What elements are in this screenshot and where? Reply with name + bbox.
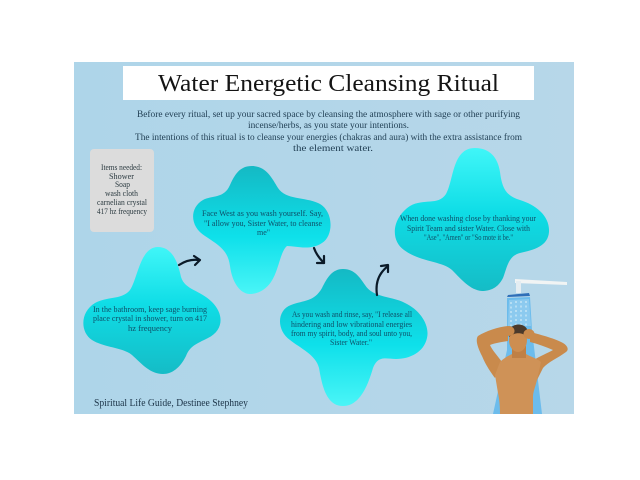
step 4 blob: Spirit Team and sister Water. Close with: [407, 224, 530, 233]
intro text: the element water.: [293, 143, 373, 153]
step 1 blob: hz frequency: [128, 324, 172, 333]
step 1 blob: place crystal in shower, turn on 417: [93, 314, 207, 323]
arrow: step 1 to step 2: [179, 256, 200, 265]
step 3 blob: hindering and low vibrational energies: [291, 320, 412, 329]
intro text: Before every ritual, set up your sacred space by cleansing the atmosphere with sage or other purifying: [137, 109, 521, 119]
step 3 blob: [280, 269, 428, 406]
panel: items needed: 417 hz frequency: [97, 207, 147, 216]
arrow: step 2 to step 3: [314, 248, 324, 263]
background panel: [74, 62, 574, 414]
intro text: incense/herbs, as you state your intentions.: [248, 120, 409, 130]
step 4 blob: "Ase", "Amen" or "So mote it be.": [424, 233, 513, 242]
illustration: man in shower: [477, 279, 568, 414]
title: Water Energetic Cleansing Ritual: [158, 70, 499, 97]
step 3 blob: Sister Water.": [330, 338, 372, 347]
arrow: step 3 to step 4: [376, 265, 388, 295]
step 1 blob: In the bathroom, keep sage burning: [93, 305, 207, 314]
panel: items needed: carnelian crystal: [97, 198, 148, 207]
intro text: The intentions of this ritual is to cleanse your energies (chakras and aura) with the extra assistance from: [135, 132, 522, 142]
step 1 blob: [83, 247, 221, 374]
step 4 blob: When done washing close by thanking your: [400, 214, 536, 223]
step 2 blob: Face West as you wash yourself. Say,: [202, 209, 323, 218]
intro text: [135, 109, 522, 153]
panel: items needed: [90, 149, 154, 232]
footer credit: Spiritual Life Guide, Destinee Stephney: [94, 398, 249, 409]
step 4 blob: [395, 148, 549, 291]
step 3 blob: As you wash and rinse, say, "I release all: [292, 310, 413, 319]
panel: items needed: Shower: [109, 172, 134, 181]
step 2 blob: me": [257, 228, 270, 237]
step 2 blob: "I allow you, Sister Water, to cleanse: [204, 219, 322, 228]
panel: items needed: Soap: [115, 180, 130, 189]
panel: items needed: Items needed:: [101, 163, 142, 172]
title: [123, 66, 534, 100]
step 2 blob: [193, 166, 331, 294]
panel: items needed: wash cloth: [105, 189, 138, 198]
step 3 blob: from my spirit, body, and soul unto you,: [291, 329, 412, 338]
